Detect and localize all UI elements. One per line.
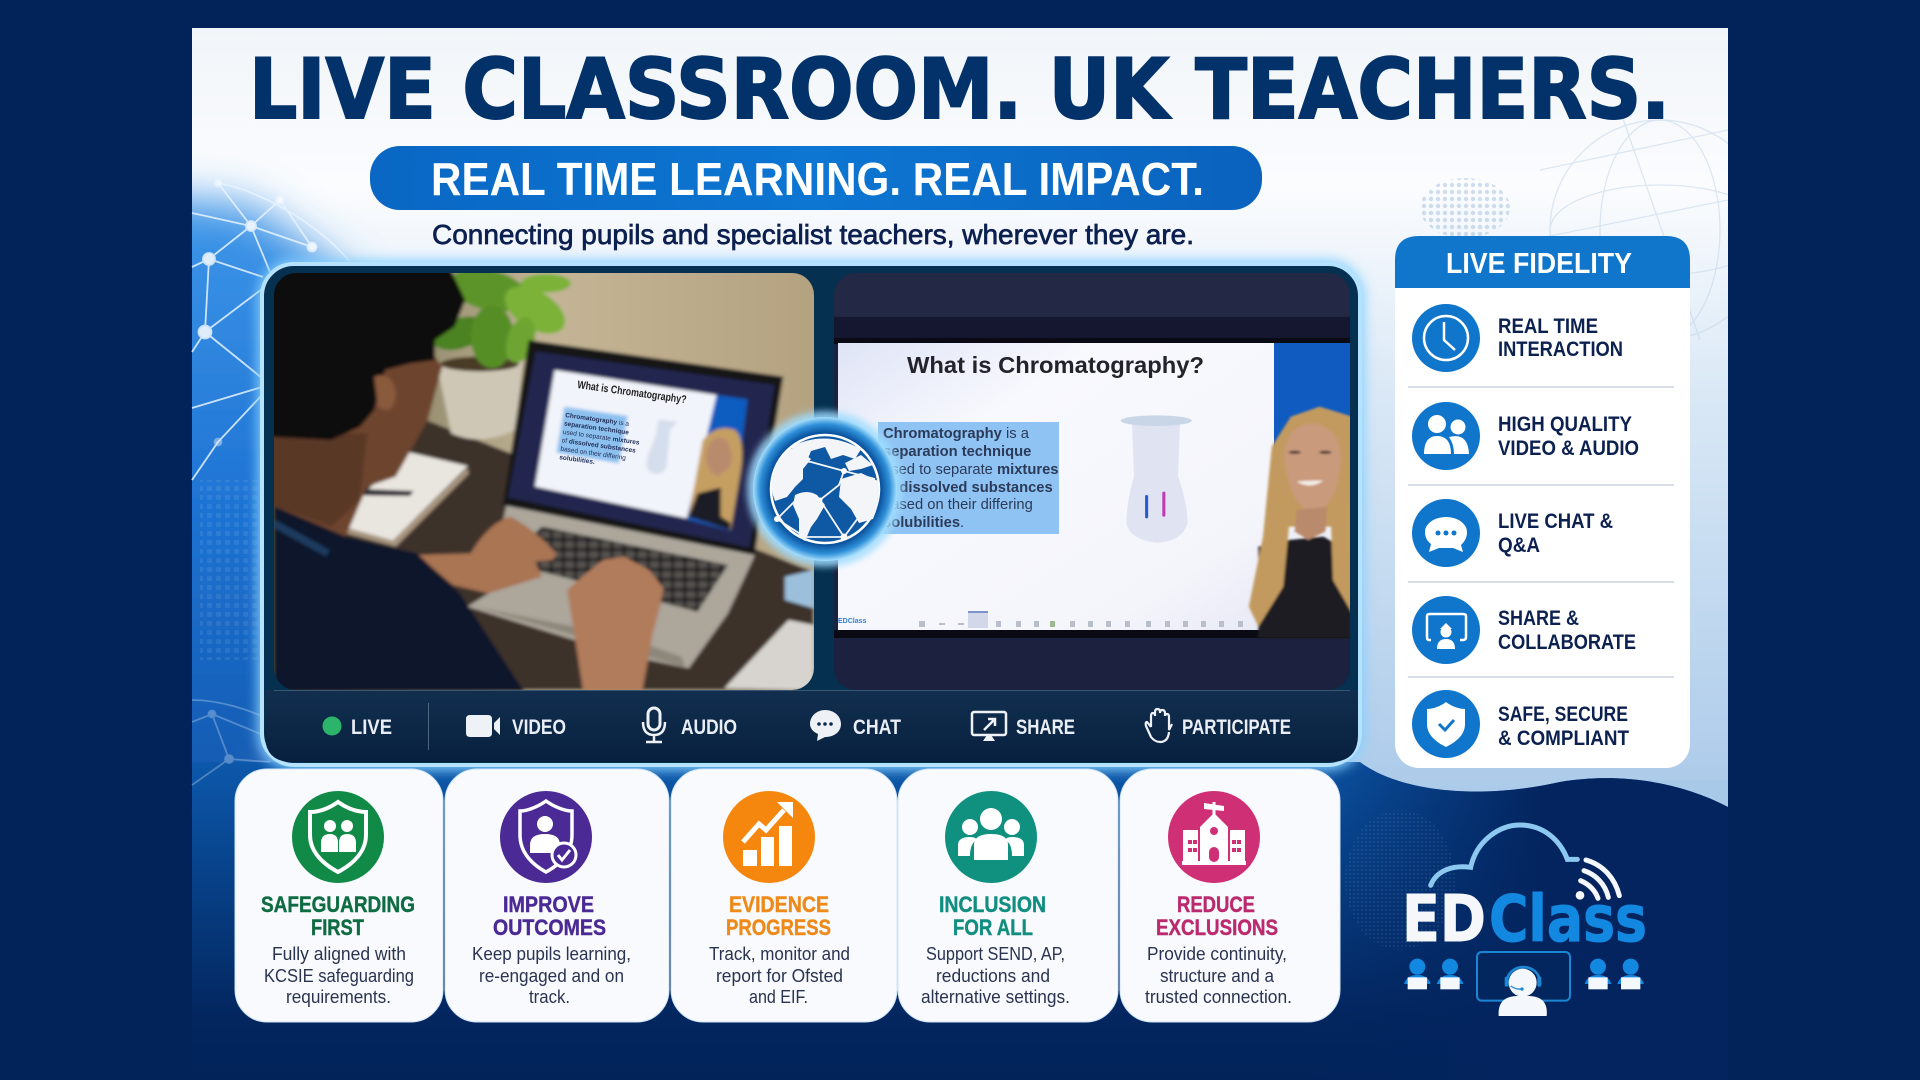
icon: rising bar chart	[723, 791, 815, 883]
network lines left	[192, 179, 350, 785]
item: high quality video and audio: VIDEO & AUDIO	[1498, 437, 1639, 460]
logo wordmark: ED	[1402, 883, 1486, 957]
slide text box: .	[960, 515, 964, 531]
toolbar	[265, 690, 1358, 762]
slide title: What is Chromatography?	[907, 352, 1204, 378]
card: inclusion for all: FOR ALL	[953, 915, 1033, 940]
video control: VIDEO	[512, 716, 566, 739]
card: reduce exclusions: structure and a	[1160, 966, 1275, 986]
card: evidence progress	[671, 769, 897, 1022]
share control	[972, 712, 1075, 741]
laptop slide text: separation technique	[564, 420, 630, 437]
item: real time interaction: REAL TIME	[1498, 315, 1598, 338]
card: improve outcomes	[445, 769, 669, 1022]
globe badge	[747, 411, 903, 567]
card: inclusion for all	[898, 769, 1118, 1022]
logo cloud and wifi	[1431, 825, 1619, 900]
card: reduce exclusions	[1120, 769, 1340, 1022]
audio control	[643, 708, 737, 742]
item: safe secure and compliant	[1412, 690, 1629, 758]
card: inclusion for all: INCLUSION	[939, 892, 1046, 917]
slide text box: based on their differing	[883, 497, 1033, 513]
slide text box: of dissolved substances	[883, 480, 1053, 496]
item: high quality video and audio: HIGH QUALITY	[1498, 413, 1632, 436]
card: improve outcomes: OUTCOMES	[493, 915, 606, 940]
audio control: AUDIO	[681, 716, 737, 739]
item: share and collaborate	[1412, 596, 1636, 664]
panel: live classroom frame	[258, 260, 1364, 770]
photo: teacher on screen	[834, 273, 1352, 690]
icon: shield with pupils	[292, 791, 384, 883]
card: safeguarding first: Fully aligned with	[272, 944, 406, 964]
slide text box: separation technique	[883, 444, 1031, 460]
item: live chat and q&a: LIVE CHAT &	[1498, 510, 1613, 533]
item: real time interaction: INTERACTION	[1498, 338, 1623, 361]
card: reduce exclusions: EXCLUSIONS	[1156, 915, 1278, 940]
chat control: CHAT	[853, 716, 901, 739]
slide text box: solubilities	[883, 515, 960, 531]
card: safeguarding first	[235, 769, 443, 1022]
live indicator: LIVE	[351, 716, 392, 739]
laptop slide text: based on their differing	[560, 446, 627, 462]
teacher	[1249, 407, 1352, 638]
title: LIVE CLASSROOM. UK TEACHERS.	[249, 41, 1670, 138]
item: safe secure and compliant: & COMPLIANT	[1498, 727, 1629, 750]
share control: SHARE	[1016, 716, 1075, 739]
card: improve outcomes: track.	[529, 987, 570, 1007]
slide text box	[878, 422, 1059, 534]
slide toolbar	[919, 611, 1243, 628]
card: safeguarding first: FIRST	[311, 915, 364, 940]
card: safeguarding first: KCSIE safeguarding	[264, 966, 414, 986]
poster background	[192, 28, 1728, 1006]
card: inclusion for all: alternative settings.	[921, 987, 1070, 1007]
tagline: Connecting pupils and specialist teachers, wherever they are.	[432, 219, 1194, 250]
logo: EDClass	[1402, 825, 1647, 1016]
laptop slide text: solubilities.	[559, 454, 595, 466]
photo: pupil at laptop	[260, 260, 831, 693]
item: real time interaction	[1412, 304, 1623, 372]
icon: group of people	[945, 791, 1037, 883]
subtitle pill: REAL TIME LEARNING. REAL IMPACT.	[431, 153, 1204, 205]
slide text box: used to separate mixtures	[883, 462, 1058, 478]
live indicator	[322, 716, 392, 739]
laptop slide title: What is Chromatography?	[577, 379, 687, 406]
card: improve outcomes: IMPROVE	[503, 892, 594, 917]
card: evidence progress: PROGRESS	[726, 915, 831, 940]
video control	[466, 715, 566, 739]
item: share and collaborate: SHARE &	[1498, 607, 1579, 630]
laptop slide text: used to separate mixtures	[562, 429, 640, 447]
slide logo: EDClass	[838, 618, 867, 625]
chat control	[810, 710, 901, 741]
icon: shield with pupil and tick	[500, 791, 592, 883]
card: inclusion for all: Support SEND, AP,	[926, 944, 1065, 964]
item: share and collaborate: COLLABORATE	[1498, 631, 1636, 654]
card: evidence progress: EVIDENCE	[729, 892, 829, 917]
card: safeguarding first: SAFEGUARDING	[261, 892, 415, 917]
flask illustration	[1121, 415, 1192, 543]
item: live chat and q&a: Q&A	[1498, 534, 1540, 557]
card: safeguarding first: requirements.	[286, 987, 391, 1007]
card: evidence progress: report for Ofsted	[716, 966, 843, 986]
icon: school building	[1168, 791, 1260, 883]
item: high quality video and audio	[1412, 402, 1639, 470]
card: improve outcomes: re-engaged and on	[479, 966, 624, 986]
item: live chat and q&a	[1412, 499, 1613, 567]
card: evidence progress: and EIF.	[749, 987, 808, 1007]
card: reduce exclusions: REDUCE	[1177, 892, 1255, 917]
card: improve outcomes: Keep pupils learning,	[472, 944, 631, 964]
laptop slide text: of dissolved substances	[561, 437, 636, 455]
laptop slide text: Chromatography is a	[565, 412, 629, 428]
slide text box: Chromatography is a	[883, 426, 1029, 442]
card: reduce exclusions: trusted connection.	[1145, 987, 1292, 1007]
panel: live fidelity	[1395, 236, 1690, 768]
card: evidence progress: Track, monitor and	[709, 944, 850, 964]
item: safe secure and compliant: SAFE, SECURE	[1498, 703, 1628, 726]
participate control	[1146, 709, 1291, 742]
card: inclusion for all: reductions and	[936, 966, 1050, 986]
panel heading: LIVE FIDELITY	[1446, 248, 1632, 280]
logo: EDClass: Class	[1489, 883, 1647, 957]
participate control: PARTICIPATE	[1182, 716, 1291, 739]
card: reduce exclusions: Provide continuity,	[1147, 944, 1287, 964]
logo people	[1404, 952, 1644, 1016]
